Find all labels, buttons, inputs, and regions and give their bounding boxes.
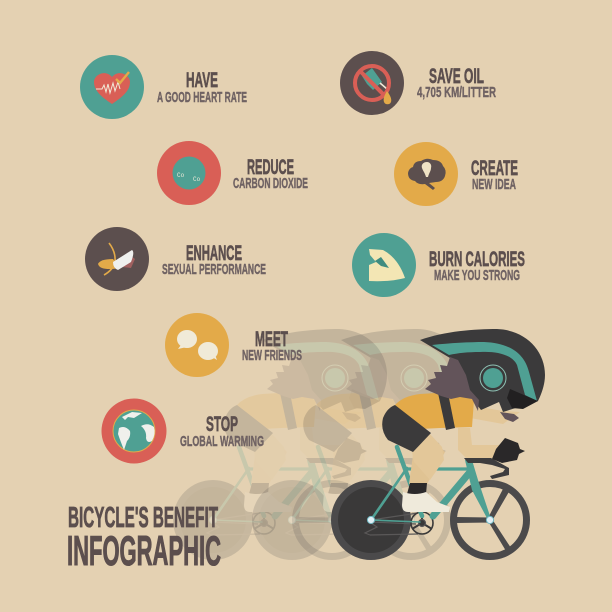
heading: ENHANCE — [186, 242, 242, 265]
subheading: MAKE YOU STRONG — [434, 268, 520, 284]
hair — [425, 357, 479, 411]
subheading: CARBON DIOXIDE — [233, 176, 308, 192]
icon: speech bubbles — [165, 313, 229, 377]
main cyclist — [331, 329, 545, 560]
handlebar — [464, 458, 509, 479]
benefit: friends — [165, 313, 302, 377]
benefit: carbon dioxide — [157, 141, 308, 205]
ghost rider near — [252, 329, 466, 560]
fork — [465, 460, 491, 520]
icon: no oil — [340, 51, 404, 115]
benefit: global warming — [102, 398, 264, 464]
frame — [371, 447, 470, 522]
heading: HAVE — [186, 69, 218, 92]
subheading: NEW IDEA — [472, 177, 516, 193]
icon: CO2 bubble — [157, 141, 221, 205]
title — [67, 502, 221, 574]
icon: brain with bulb — [394, 142, 458, 206]
heading: CREATE — [471, 157, 518, 180]
ghost rider far — [173, 329, 387, 560]
icon: CO2 bubble: Co — [177, 172, 185, 179]
subheading: NEW FRIENDS — [242, 348, 302, 364]
ear ring — [480, 365, 506, 391]
benefit: new idea — [394, 142, 518, 206]
jersey strap — [438, 393, 455, 430]
helmet — [420, 329, 545, 412]
benefit: save oil — [340, 51, 496, 115]
arm — [458, 428, 503, 458]
benefit: sexual performance — [85, 227, 266, 291]
rear disc wheel — [331, 480, 411, 560]
shorts — [382, 405, 431, 452]
heading: STOP — [206, 413, 238, 436]
face — [470, 400, 520, 424]
subheading: A GOOD HEART RATE — [157, 90, 247, 106]
benefit: burn calories — [352, 233, 525, 297]
chain and crank — [365, 512, 433, 535]
wheel hubs — [367, 516, 494, 524]
heading: SAVE OIL — [429, 65, 484, 88]
icon: banana — [85, 227, 149, 291]
icon: globe — [102, 398, 166, 464]
visor — [507, 389, 538, 409]
heading: REDUCE — [247, 156, 294, 179]
glove — [492, 438, 525, 463]
title line one: BICYCLE'S BENEFIT — [68, 502, 218, 534]
heading: BURN CALORIES — [429, 248, 525, 271]
icon: heart — [80, 55, 144, 119]
thigh — [412, 434, 444, 480]
sock — [407, 483, 427, 494]
helmet stripe — [432, 342, 537, 401]
mouth strap — [500, 412, 519, 422]
subheading: SEXUAL PERFORMANCE — [162, 262, 266, 278]
icon: flexed arm — [352, 233, 416, 297]
subheading: GLOBAL WARMING — [180, 434, 264, 450]
benefit: heart rate — [80, 55, 247, 119]
subheading: 4,705 KM/LITTER — [417, 85, 496, 101]
jersey — [395, 392, 474, 429]
shoe — [402, 492, 450, 512]
icon: CO2 bubble: Co — [193, 176, 201, 183]
heading: MEET — [255, 328, 288, 351]
front spoked wheel — [454, 484, 526, 556]
title line two: INFOGRAPHIC — [67, 527, 221, 574]
lower leg — [409, 438, 445, 484]
